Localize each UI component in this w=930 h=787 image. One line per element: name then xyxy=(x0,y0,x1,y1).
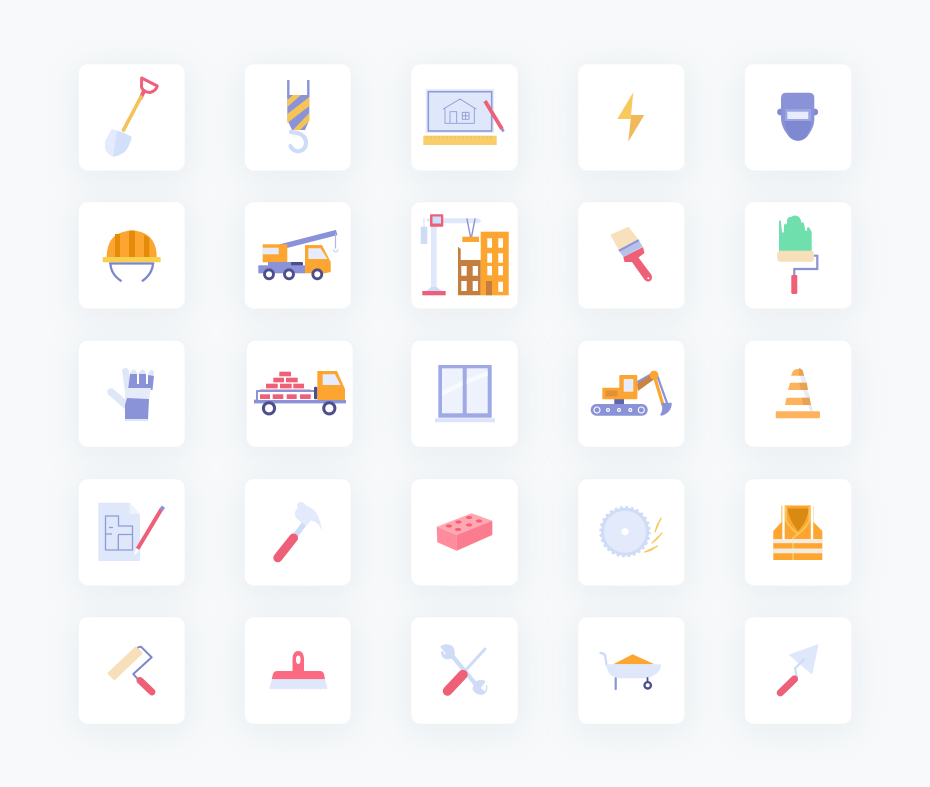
icon card: blueprint xyxy=(411,64,518,170)
icon card: circular saw blade xyxy=(578,479,684,586)
icon card: safety vest xyxy=(744,479,852,586)
icon card: hard hat xyxy=(78,202,185,308)
icon card: paint roller xyxy=(744,202,852,308)
icon card: welding mask xyxy=(744,64,852,170)
icon card: angled paint roller xyxy=(78,617,185,724)
icon card: trowel xyxy=(744,617,852,724)
icon card: floor plan and pencil xyxy=(78,479,185,586)
icon card: crane hook xyxy=(244,64,351,170)
icon card: tower crane and buildings xyxy=(411,202,518,308)
icon card: wheelbarrow xyxy=(578,617,684,724)
icon card: lightning bolt xyxy=(578,64,684,170)
icon card: window xyxy=(411,340,518,447)
icon card: brick xyxy=(411,479,518,586)
icon card: hammer xyxy=(244,479,351,586)
icon card: brick truck xyxy=(246,340,353,447)
icon card: crane truck xyxy=(244,202,351,308)
icon card: shovel xyxy=(78,64,185,170)
icon card: work glove xyxy=(78,340,185,447)
icon card: excavator xyxy=(578,340,684,447)
icon card: traffic cone xyxy=(744,340,852,447)
icon card: paint brush xyxy=(578,202,684,308)
icon card: notched spatula xyxy=(244,617,351,724)
icon card: wrench and screwdriver xyxy=(411,617,518,724)
